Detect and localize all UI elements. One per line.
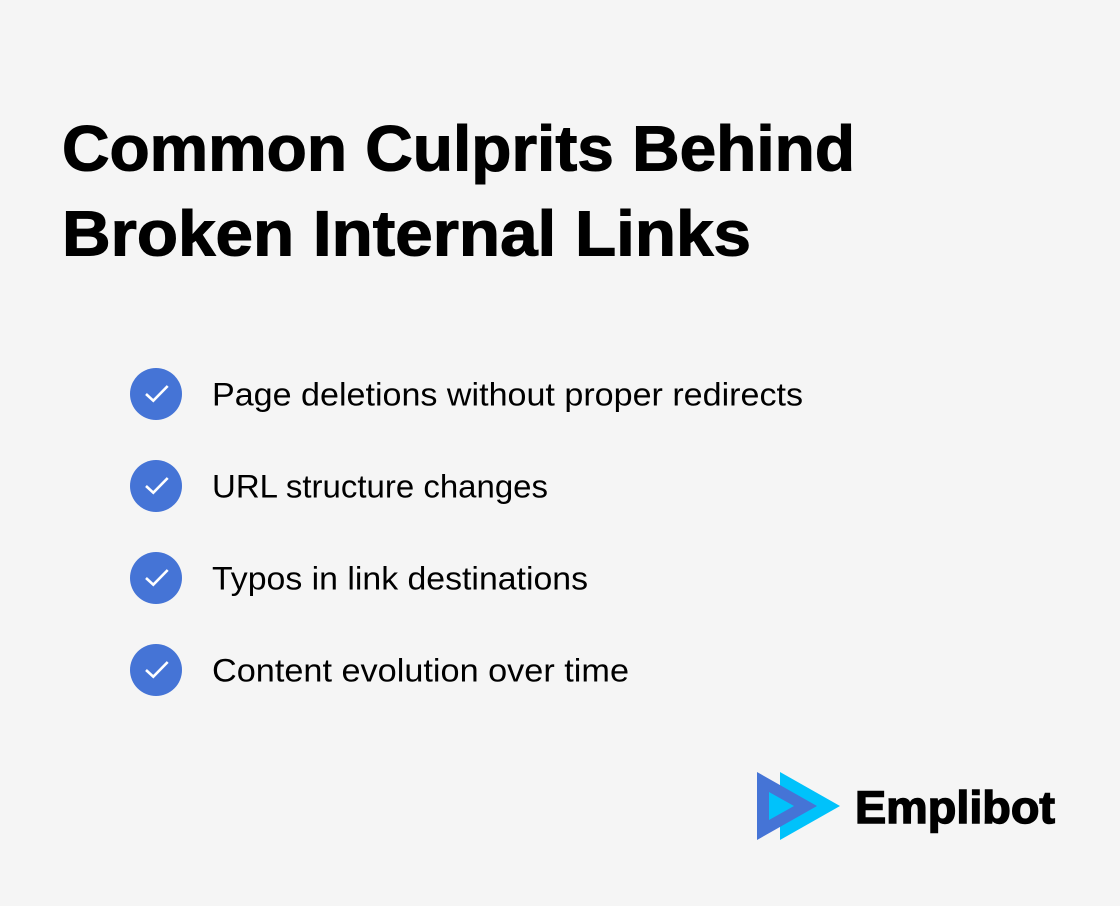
icon: play triangles [757, 772, 840, 840]
list item: page deletions: Page deletions without proper redirects [212, 376, 803, 412]
list item: content evolution: Content evolution over time [212, 652, 629, 688]
logo: Emplibot [757, 772, 1055, 840]
list item: URL changes [130, 460, 548, 512]
wordmark: Emplibot [855, 782, 1055, 833]
list item: typos: Typos in link destinations [212, 560, 588, 596]
list item: URL changes: URL structure changes [212, 468, 548, 504]
list item: typos [130, 552, 588, 604]
list item: page deletions [130, 368, 803, 420]
checklist [130, 368, 803, 696]
list item: content evolution [130, 644, 629, 696]
title [62, 112, 855, 270]
title: Broken Internal Links [62, 198, 751, 270]
title: Common Culprits Behind [62, 112, 855, 184]
